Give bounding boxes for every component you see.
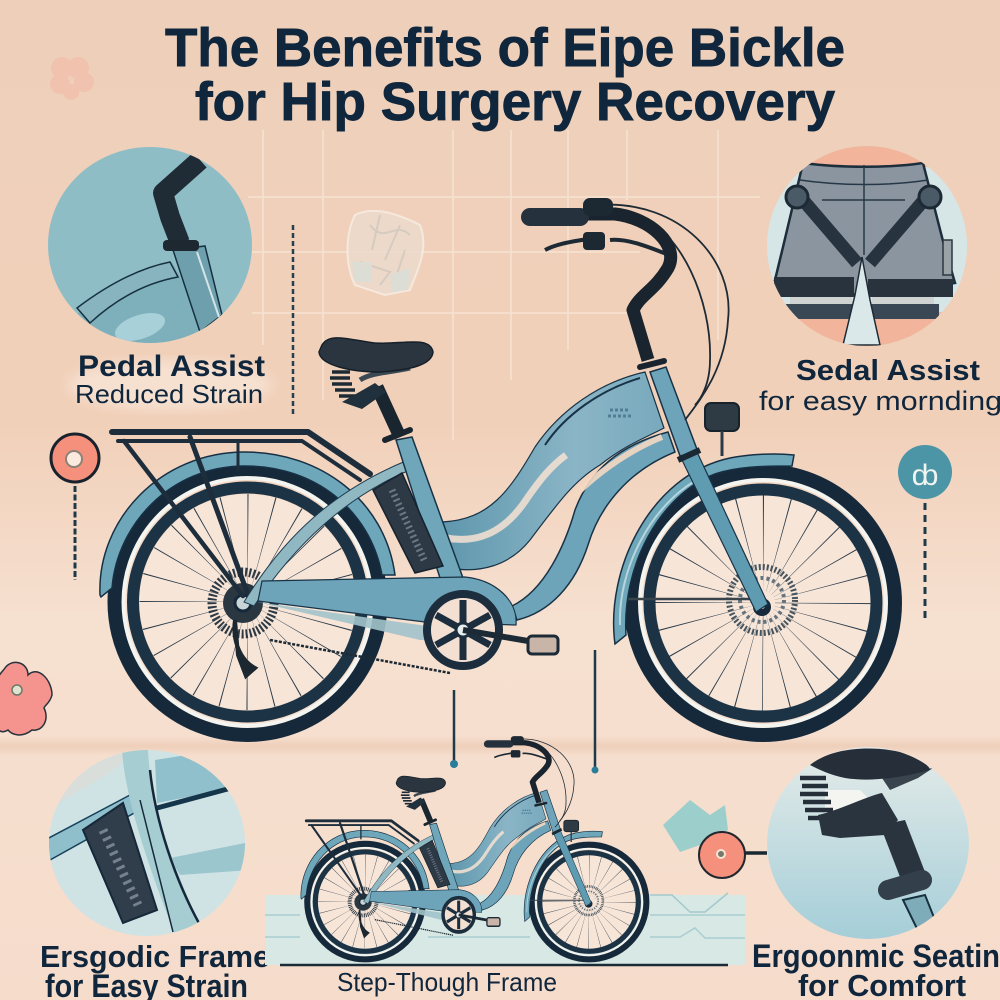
ergonomic frame circle image xyxy=(45,745,250,940)
decorative flower: top left xyxy=(50,57,94,100)
hip support label: for easy mornding xyxy=(759,386,1000,416)
title: The Benefits of Eipe Bickle xyxy=(165,18,845,78)
panel: ergonomic frame xyxy=(40,745,270,1000)
small fenders and rack xyxy=(301,821,602,922)
pedal assist circle image xyxy=(48,147,252,343)
title: for Hip Surgery Recovery xyxy=(195,72,835,132)
ergonomic seating label xyxy=(752,938,1000,1000)
panel: hip support shorts xyxy=(759,140,1000,416)
marker: teal circle right xyxy=(898,445,952,618)
decorative flower: center xyxy=(348,211,423,295)
panel: ergonomic seating xyxy=(752,747,1000,1000)
small flower and coral marker xyxy=(663,800,767,878)
step-through frame xyxy=(234,367,768,676)
main e-bike illustration xyxy=(100,198,895,735)
ergonomic frame label xyxy=(40,939,270,1000)
title xyxy=(165,18,845,132)
rear wheel xyxy=(114,469,380,735)
small e-bike illustration xyxy=(301,736,646,959)
small wheels xyxy=(307,844,646,959)
pointer lines to small bike xyxy=(450,650,598,774)
hip support label: Sedal Assist xyxy=(796,355,980,387)
dotted callout line: pedal assist xyxy=(292,225,294,415)
marker: coral circle left xyxy=(51,434,99,580)
ergonomic frame label: Ersgodic Frame xyxy=(40,939,270,974)
pedal assist label: Pedal Assist xyxy=(78,350,265,383)
small handlebars xyxy=(488,736,579,842)
panel: pedal assist xyxy=(40,140,272,410)
marker: teal circle right: ȸ xyxy=(912,459,938,492)
pedal assist label xyxy=(68,350,272,410)
flower: coral left xyxy=(0,662,52,735)
bottom scene panel xyxy=(265,893,745,965)
ergonomic seating circle image xyxy=(767,747,969,945)
pedal assist label: Reduced Strain xyxy=(75,379,263,409)
hip support circle image xyxy=(767,146,967,346)
front wheel xyxy=(622,471,895,735)
step-through frame caption: Step-Though Frame xyxy=(337,967,557,997)
hip support label xyxy=(759,355,1000,416)
handlebars xyxy=(530,198,739,456)
saddle xyxy=(319,338,433,440)
fenders and rear rack xyxy=(100,432,794,644)
small frame and saddle xyxy=(359,776,591,937)
